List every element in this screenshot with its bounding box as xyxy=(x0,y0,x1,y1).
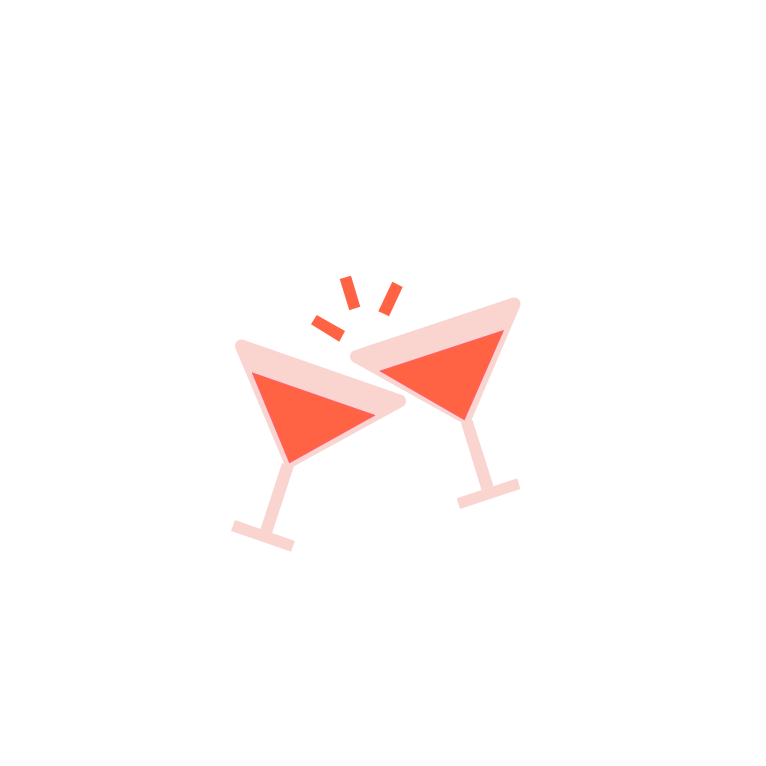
icon: clink spark lines xyxy=(311,276,403,342)
right glass drink xyxy=(380,330,504,420)
icon: right cocktail glass xyxy=(356,304,520,509)
right glass stem xyxy=(461,420,494,490)
right glass bowl xyxy=(356,304,514,418)
spark left xyxy=(311,315,345,342)
left glass bowl xyxy=(242,346,400,461)
spark middle xyxy=(340,276,360,310)
icon: left cocktail glass xyxy=(231,346,400,552)
left glass drink xyxy=(252,373,375,463)
left glass stem xyxy=(260,463,294,534)
spark right xyxy=(378,282,403,316)
left glass base xyxy=(231,520,295,552)
right glass base xyxy=(457,478,520,509)
